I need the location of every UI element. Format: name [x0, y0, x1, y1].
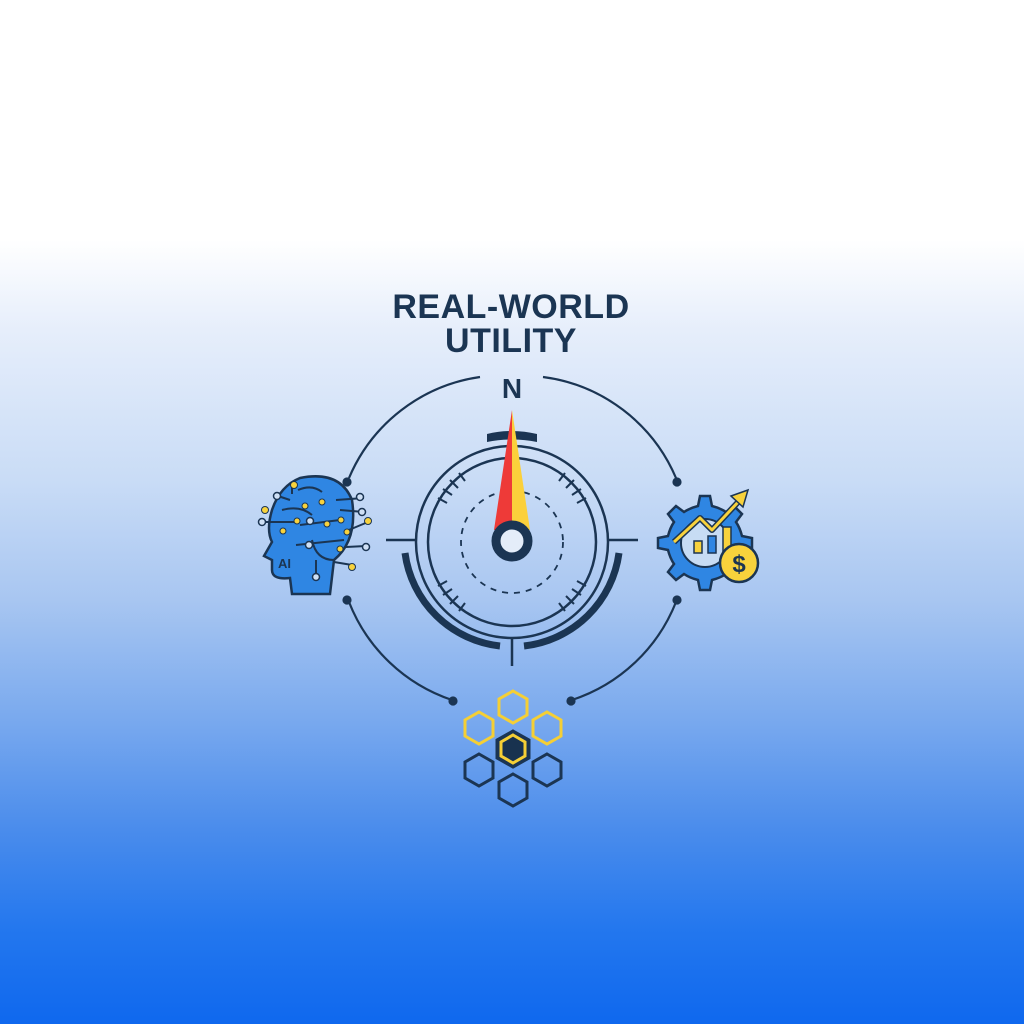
outer connector ring [344, 377, 680, 704]
title: UTILITY [445, 322, 577, 360]
icon: AI brain head [258, 476, 372, 594]
icon: hexagon network [465, 691, 561, 806]
icon: gear with growth chart and dollar [658, 490, 758, 590]
needle [494, 410, 530, 557]
title [392, 288, 630, 360]
compass [386, 431, 638, 666]
icon: gear with growth chart and dollar: $ [732, 551, 746, 578]
title: REAL-WORLD [392, 288, 630, 326]
icon: AI brain head: AI [278, 556, 291, 571]
compass N label: N [502, 373, 522, 404]
